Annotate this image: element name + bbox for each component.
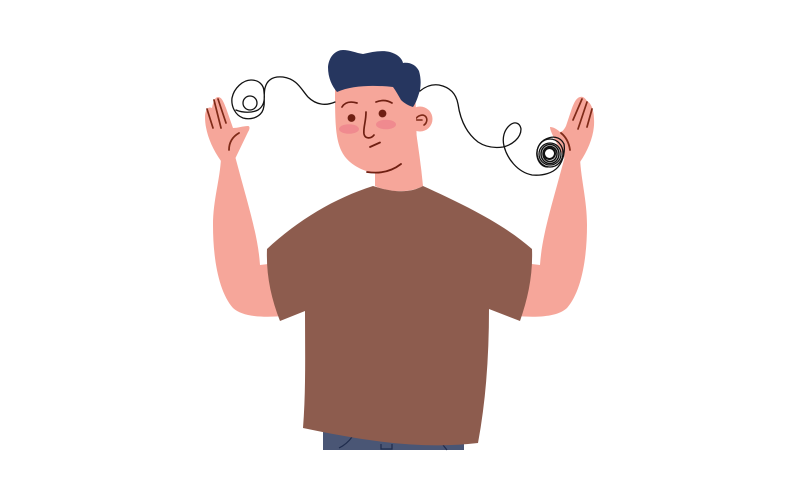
t-shirt (267, 186, 532, 445)
face (335, 75, 417, 173)
right arm and hand (515, 97, 594, 317)
hair (328, 50, 421, 107)
nose (364, 112, 374, 138)
neck (375, 125, 423, 191)
mouth (370, 142, 380, 147)
jeans (323, 430, 464, 450)
string spiral knot (537, 139, 563, 167)
right tangled string (420, 85, 564, 175)
chin line (367, 164, 401, 173)
left arm and hand (205, 97, 285, 317)
ear (408, 106, 432, 132)
cheeks (339, 120, 396, 134)
eyebrows (342, 101, 392, 107)
eyes (348, 110, 386, 122)
left tangled string (232, 77, 335, 119)
